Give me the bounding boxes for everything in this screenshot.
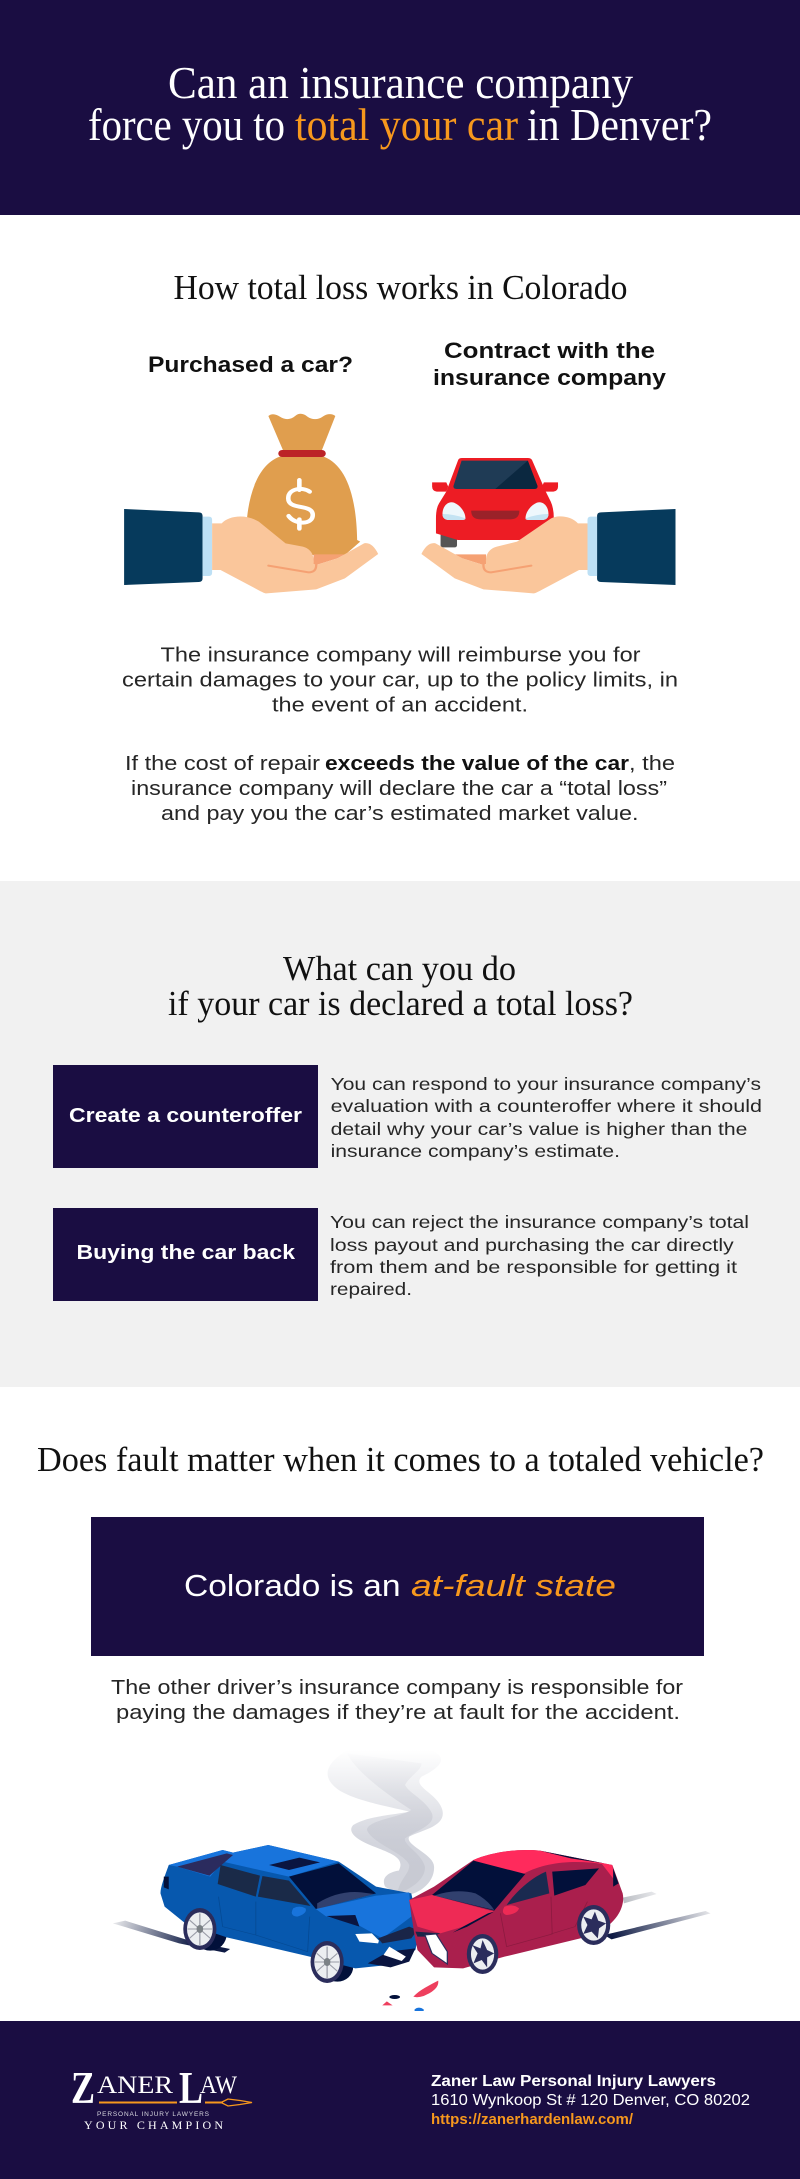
heading: does fault matter: Does fault matter when it comes to a totaled vehicle? — [37, 1440, 764, 1479]
option: buying the car back: Buying the car back — [76, 1242, 296, 1264]
skid marks — [113, 1892, 711, 1953]
footer — [0, 2021, 800, 2179]
heading: how total loss works: How total loss works in Colorado — [174, 268, 628, 307]
red car — [409, 1850, 623, 1974]
logo: Zaner Law: Z — [71, 2062, 95, 2113]
label: contract with the insurance company: Contract with the — [444, 338, 655, 363]
icon: hand holding money bag — [124, 414, 378, 593]
text block: total loss declaration — [125, 753, 675, 825]
text block: counteroffer description: detail why your car’s value is higher than the — [331, 1119, 747, 1139]
panel: what can you do — [0, 881, 800, 1387]
smoke — [328, 1750, 443, 1896]
text block: total loss declaration: insurance company will declare the car a “total loss” — [131, 778, 667, 800]
title: Can an insurance company — [168, 57, 633, 108]
callout: at-fault state: Colorado is an — [184, 1568, 400, 1603]
contact details: Zaner Law Personal Injury Lawyers — [431, 2073, 716, 2090]
illustration: car crash — [113, 1750, 711, 2011]
panel: does fault matter — [0, 1387, 800, 2021]
text block: buying back description: loss payout and purchasing the car directly — [330, 1235, 734, 1255]
logo: Zaner Law: L — [179, 2062, 203, 2113]
option: buying the car back — [53, 1208, 318, 1301]
contact details: https://zanerhardenlaw.com/ — [431, 2112, 633, 2128]
title: total your car — [295, 99, 518, 150]
blue car — [160, 1845, 420, 1983]
text block: other driver's insurer — [111, 1677, 683, 1724]
label: contract with the insurance company: insurance company — [433, 365, 667, 390]
text block: reimbursement: The insurance company will reimburse you for — [160, 644, 641, 666]
text block: counteroffer description — [331, 1074, 762, 1161]
callout: at-fault state: at-fault state — [411, 1568, 616, 1603]
text block: buying back description: from them and be responsible for getting it — [330, 1257, 737, 1277]
text block: other driver's insurer: The other driver’s insurance company is responsible for — [111, 1677, 683, 1699]
header banner — [0, 0, 800, 215]
text block: other driver's insurer: paying the damages if they’re at fault for the accident. — [116, 1702, 680, 1724]
text block: buying back description: repaired. — [330, 1279, 412, 1299]
option: create a counteroffer — [53, 1065, 318, 1168]
text block: total loss declaration: exceeds the value of the car — [325, 753, 629, 775]
text block: buying back description: You can reject the insurance company’s total — [330, 1212, 749, 1232]
heading: what can you do: if your car is declared a total loss? — [168, 984, 633, 1023]
icon: hand holding car — [421, 458, 676, 593]
logo: Zaner Law: ANER — [97, 2072, 173, 2099]
debris — [382, 1981, 438, 2011]
option: create a counteroffer: Create a counteroffer — [69, 1105, 302, 1127]
text block: reimbursement: the event of an accident. — [272, 694, 528, 716]
text block: buying back description — [330, 1212, 749, 1299]
contact details — [431, 2073, 750, 2128]
text block: counteroffer description: You can respond to your insurance company’s — [331, 1074, 761, 1094]
text block: reimbursement: certain damages to your car, up to the policy limits, in — [122, 670, 678, 692]
logo: Zaner Law: AW — [200, 2072, 237, 2099]
heading: what can you do — [168, 949, 633, 1023]
title: in Denver? — [527, 99, 712, 150]
text block: total loss declaration: If the cost of repair — [125, 753, 320, 775]
heading: what can you do: What can you do — [283, 949, 516, 988]
logo: Zaner Law — [71, 2062, 252, 2132]
text block: reimbursement — [122, 644, 678, 716]
title — [88, 57, 712, 150]
label: contract with the insurance company — [433, 338, 667, 390]
callout: at-fault state — [91, 1517, 704, 1656]
label: purchased a car: Purchased a car? — [148, 352, 353, 377]
text block: counteroffer description: insurance company’s estimate. — [331, 1141, 620, 1161]
text block: total loss declaration: and pay you the car’s estimated market value. — [161, 803, 638, 825]
panel: how total loss works — [0, 215, 800, 881]
text block: total loss declaration: , the — [629, 753, 675, 775]
logo: Zaner Law: PERSONAL INJURY LAWYERS — [97, 2111, 210, 2118]
contact details: 1610 Wynkoop St # 120 Denver, CO 80202 — [431, 2092, 750, 2109]
text block: counteroffer description: evaluation with a counteroffer where it should — [331, 1096, 762, 1116]
title: force you to — [88, 99, 285, 150]
logo: Zaner Law: YOUR CHAMPION — [84, 2118, 223, 2132]
